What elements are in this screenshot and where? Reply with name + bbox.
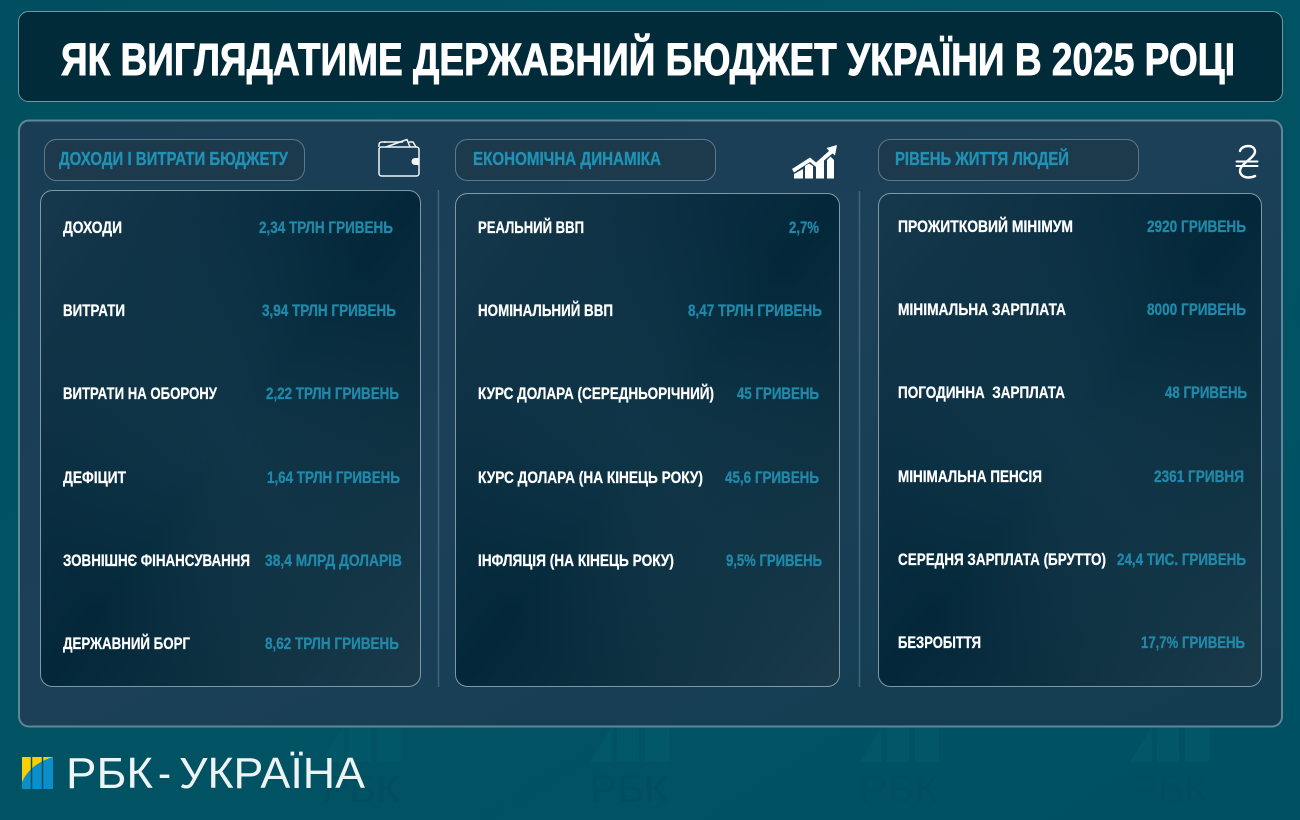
logo wordmark: - [158, 749, 171, 798]
icon: hryvnia sign [1236, 146, 1258, 178]
row: average wage: 24,4 ТИС. ГРИВЕНЬ [1117, 551, 1246, 569]
heading: living standards: РІВЕНЬ ЖИТТЯ ЛЮДЕЙ [895, 148, 1069, 169]
watermarks: РБК [1130, 769, 1208, 811]
row: minimum wage: 8000 ГРИВЕНЬ [1147, 301, 1246, 319]
row: average wage: СЕРЕДНЯ ЗАРПЛАТА (БРУТТО) [898, 551, 1106, 569]
logo wordmark: РБК [66, 749, 153, 798]
row: hourly wage: ПОГОДИННА ЗАРПЛАТА [898, 384, 1065, 402]
row: subsistence minimum: 2920 ГРИВЕНЬ [1147, 218, 1246, 236]
heading: living standards [878, 140, 1138, 180]
row: minimum wage: МІНІМАЛЬНА ЗАРПЛАТА [898, 301, 1066, 319]
main panel [19, 120, 1282, 726]
row: defence: 2,22 ТРЛН ГРИВЕНЬ [266, 385, 399, 403]
row: external financing [63, 552, 402, 570]
logo wordmark: УКРАЇНА [179, 749, 366, 798]
row: nominal GDP: 8,47 ТРЛН ГРИВЕНЬ [688, 302, 822, 320]
row: minimum pension [898, 468, 1244, 486]
watermarks: РБК [590, 769, 668, 811]
heading: budget [44, 140, 304, 180]
row: subsistence minimum [898, 217, 1246, 236]
row: spending [63, 302, 396, 320]
row: unemployment: БЕЗРОБІТТЯ [898, 634, 981, 652]
row: minimum pension: МІНІМАЛЬНА ПЕНСІЯ [898, 468, 1042, 486]
row: defence [63, 385, 399, 403]
row: average exchange rate: 45 ГРИВЕНЬ [737, 385, 819, 403]
row: nominal GDP: НОМІНАЛЬНИЙ ВВП [478, 301, 613, 320]
row: inflation: 9,5% ГРИВЕНЬ [726, 552, 822, 570]
icon: logo mark [22, 757, 53, 789]
row: deficit: ДЕФІЦИТ [63, 469, 126, 487]
row: inflation [478, 552, 822, 570]
row: year-end exchange rate: 45,6 ГРИВЕНЬ [725, 469, 819, 487]
row: income [63, 219, 393, 237]
row: income: ДОХОДИ [63, 219, 122, 237]
row: real GDP: 2,7% [789, 219, 819, 237]
heading: economy: ЕКОНОМІЧНА ДИНАМІКА [473, 149, 661, 169]
row: unemployment [898, 634, 1245, 652]
row: state debt: 8,62 ТРЛН ГРИВЕНЬ [265, 635, 399, 653]
row: subsistence minimum: ПРОЖИТКОВИЙ МІНІМУМ [898, 217, 1073, 236]
row: average exchange rate: КУРС ДОЛАРА (СЕРЕДНЬОРІЧНИЙ) [478, 384, 714, 403]
row: external financing: 38,4 МЛРД ДОЛАРІВ [265, 552, 402, 570]
row: minimum wage [898, 301, 1246, 319]
row: nominal GDP [478, 301, 822, 320]
row: year-end exchange rate: КУРС ДОЛАРА (НА КІНЕЦЬ РОКУ) [478, 469, 703, 487]
logo wordmark [66, 749, 366, 798]
row: minimum pension: 2361 ГРИВНЯ [1154, 468, 1244, 486]
watermarks: РБК [322, 769, 400, 811]
watermarks [322, 714, 1209, 811]
watermarks: РБК [860, 769, 938, 811]
row: hourly wage [898, 384, 1247, 402]
logo [22, 749, 366, 798]
row: deficit [63, 469, 400, 487]
row: real GDP [478, 218, 819, 237]
panel: budget card [40, 190, 420, 686]
row: defence: ВИТРАТИ НА ОБОРОНУ [63, 385, 218, 403]
icon: growth chart [792, 145, 837, 178]
row: spending: 3,94 ТРЛН ГРИВЕНЬ [262, 302, 396, 320]
row: income: 2,34 ТРЛН ГРИВЕНЬ [259, 219, 393, 237]
panel: economy card [456, 194, 840, 686]
row: spending: ВИТРАТИ [63, 302, 125, 320]
title bar [18, 12, 1282, 102]
row: deficit: 1,64 ТРЛН ГРИВЕНЬ [267, 469, 400, 487]
panel: living standards card [878, 194, 1262, 686]
row: real GDP: РЕАЛЬНИЙ ВВП [478, 218, 584, 237]
icon: wallet [379, 140, 419, 176]
row: unemployment: 17,7% ГРИВЕНЬ [1141, 634, 1245, 652]
row: external financing: ЗОВНІШНЄ ФІНАНСУВАННЯ [63, 552, 250, 570]
heading: budget: ДОХОДИ І ВИТРАТИ БЮДЖЕТУ [59, 149, 289, 169]
row: inflation: ІНФЛЯЦІЯ (НА КІНЕЦЬ РОКУ) [478, 552, 674, 570]
heading: economy [456, 140, 716, 180]
row: state debt [63, 634, 399, 653]
row: hourly wage: 48 ГРИВЕНЬ [1165, 384, 1247, 402]
row: state debt: ДЕРЖАВНИЙ БОРГ [63, 634, 191, 653]
